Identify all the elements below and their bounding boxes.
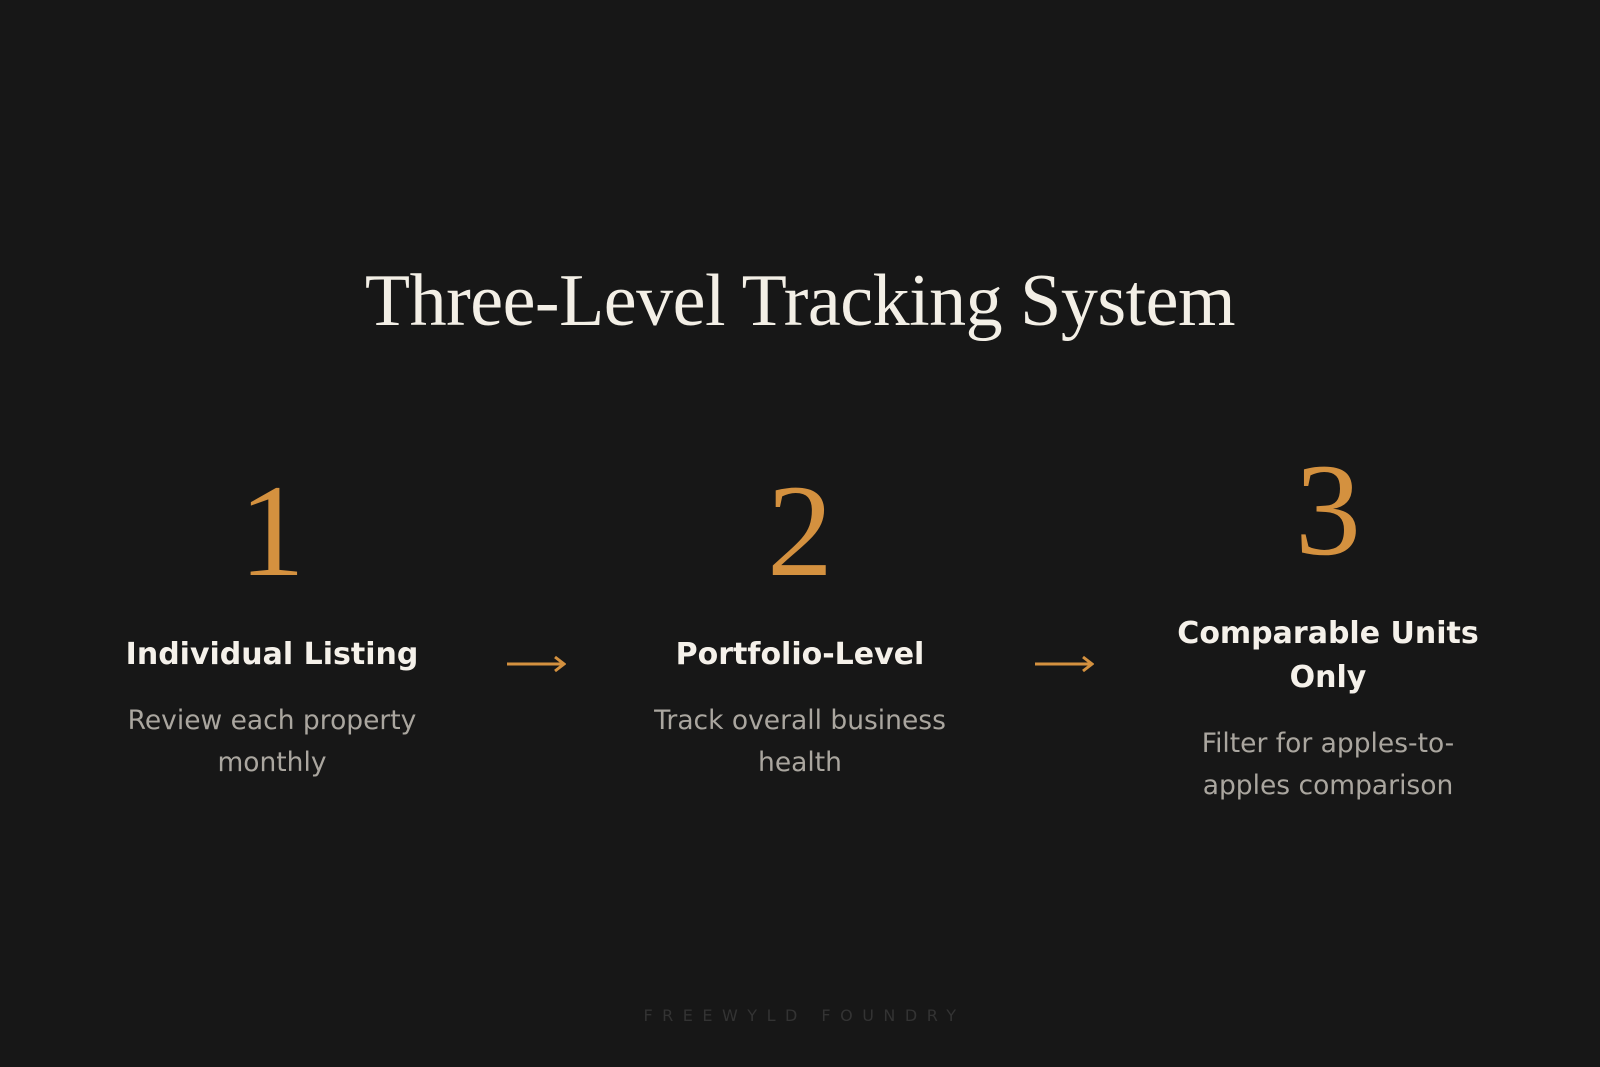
description 1: Review each property (128, 705, 416, 736)
description 3: apples comparison (1203, 770, 1453, 801)
heading 3: Comparable Units (1177, 616, 1479, 651)
description 1 (128, 705, 416, 778)
arrow 1 (507, 656, 566, 672)
description 2: health (758, 747, 842, 778)
title: Three-Level Tracking System (365, 260, 1235, 342)
number 1: 1 (239, 457, 305, 604)
arrow 2 (1035, 656, 1094, 672)
step 3 (1177, 436, 1479, 801)
heading 2: Portfolio-Level (676, 637, 924, 672)
number 3: 3 (1295, 436, 1361, 583)
description 1: monthly (217, 747, 327, 778)
description 3 (1202, 728, 1454, 801)
number 2: 2 (767, 457, 833, 604)
heading 3 (1177, 616, 1479, 695)
description 2 (654, 705, 946, 778)
step 2 (654, 457, 946, 778)
heading 1: Individual Listing (126, 637, 418, 672)
footer brand: FREEWYLD FOUNDRY (643, 1006, 966, 1025)
description 2: Track overall business (654, 705, 946, 736)
step 1 (126, 457, 418, 778)
description 3: Filter for apples-to- (1202, 728, 1454, 759)
heading 3: Only (1290, 660, 1366, 695)
